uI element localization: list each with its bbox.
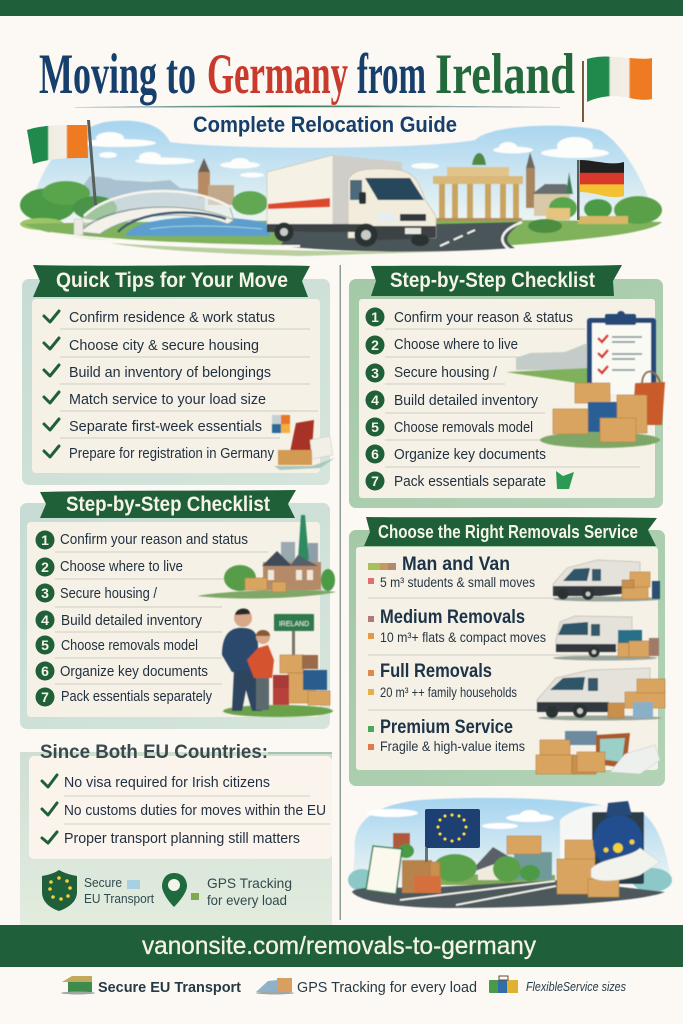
house and building [514,852,552,880]
check item: no visa: No visa required for Irish citizens [64,775,270,791]
step 7: 7 [41,689,49,705]
title: from [357,43,426,106]
step 2: 2 [41,559,49,575]
trees right [614,196,662,224]
vertical divider [340,265,341,920]
road curves [50,233,300,246]
panel background [20,503,330,729]
step 7 [366,472,546,490]
step 4: Build detailed inventory [61,613,203,629]
step 7 [36,688,213,706]
German city [526,168,535,208]
step 1: 1 [371,309,379,325]
check item 3: Build an inventory of belongings [69,365,271,381]
icon: German flag [577,160,624,220]
service: premium service: Fragile & high-value items [380,739,525,754]
step 5: Choose removals model [394,420,533,436]
service: man and van: 5 m³ students & small moves [380,575,535,590]
bridge [80,207,234,234]
hero illustration: Ireland to Germany [20,121,662,256]
step 4: 4 [371,392,379,408]
GPS tracking label: for every load [207,892,287,908]
ground [24,220,662,247]
service: full removals: 20 m³ ++ family households [380,685,517,700]
title [39,43,575,106]
service: medium removals [368,607,546,645]
step 1: Confirm your reason & status [394,310,573,326]
step 3 [366,364,498,382]
panel: choose the right removals service [349,517,665,786]
step 6: Organize key documents [60,664,208,680]
step 4: 4 [41,612,49,628]
illustration: German house with boxes [197,515,336,599]
icon: van 2 [553,616,659,660]
step 5 [366,418,533,436]
illustration: clipboard with boxes and bag [506,311,665,448]
step 1 [366,308,573,326]
water [125,217,270,236]
footer feature strip [61,976,626,996]
paper card [29,756,332,859]
paper card [32,299,320,473]
step 6 [366,444,546,464]
step 5 [36,636,198,654]
step 2: Choose where to live [60,559,183,575]
check item 2: Choose city & secure housing [69,338,259,354]
step 3: 3 [371,365,379,381]
illustration: EU moving scene [348,798,672,908]
check item: no customs: No customs duties for moves within the EU [64,803,326,819]
website band: vanonsite.com/removals-to-germany [142,932,536,960]
icon: van 3 [537,668,665,720]
step 4: Build detailed inventory [394,393,539,409]
step 7: Pack essentials separately [61,689,213,705]
title: Germany [207,43,348,106]
step 3: Secure housing / [60,586,158,602]
service: full removals: Full Removals [380,661,492,682]
panel: since both EU countries [20,741,332,925]
icon: flexible sizes case [489,976,518,993]
illustration: couple with boxes and sign: IRELAND [279,621,309,628]
road [352,880,665,908]
ribbon heading [371,265,622,296]
check item 1: Confirm residence & work status [69,310,275,326]
step 3 [36,584,158,602]
service: medium removals: Medium Removals [380,607,525,628]
step 5: Choose removals model [61,638,198,654]
step 4 [366,390,539,410]
step 2 [36,558,183,576]
title underline [75,106,560,108]
GPS tracking text: GPS Tracking for every load [297,979,477,996]
step 7: 7 [371,473,379,489]
service: full removals [368,661,517,700]
step 1: Confirm your reason and status [60,532,248,548]
secure EU transport text: Secure EU Transport [98,979,241,996]
step 4 [36,610,203,630]
icon: secure transport [61,976,95,994]
check item 5: Separate first-week essentials [69,419,262,435]
heading: Since Both EU Countries: [40,741,268,763]
ribbon heading: Quick Tips for Your Move [56,269,288,292]
checklist sheet and boxes [393,833,410,851]
step 5: 5 [41,637,49,653]
icon: premium items [536,731,660,774]
step 5: 5 [371,419,379,435]
distant city left [80,176,205,215]
flexible service sizes text: FlexibleService sizes [526,979,626,994]
step 6: Organize key documents [394,447,546,463]
paper card [27,522,320,717]
step 3: Secure housing / [394,365,498,381]
GPS tracking label [207,875,292,908]
step 7: Pack essentials separate [394,474,546,490]
panel: quick tips [22,265,335,485]
icon: Irish flag beside title [582,56,652,122]
icon: EU flag [425,809,480,862]
secure EU transport label [84,875,154,906]
step 2 [366,336,518,354]
paper card [359,299,655,498]
secure EU transport label: Secure [84,875,122,890]
website band [0,925,683,967]
icon: van and parcel [256,978,294,994]
ribbon heading: Step-by-Step Checklist [390,269,595,292]
GPS tracking label: GPS Tracking [207,875,292,891]
panel background [349,279,663,508]
icon: essentials box, book and tiles [272,415,335,470]
title: Moving to [39,43,196,106]
step 6: 6 [41,663,49,679]
subtitle: Complete Relocation Guide [193,112,457,137]
step 2: 2 [371,337,379,353]
ribbon heading: Choose the Right Removals Service [378,522,638,542]
check item 4: Match service to your load size [69,392,266,408]
step 3: 3 [41,585,49,601]
icon: GPS pin [162,873,199,907]
panel background [20,752,332,925]
top band [0,0,683,16]
service: premium service [368,717,525,754]
icon: green bag [556,471,574,489]
panel background [22,279,330,485]
ribbon heading: Step-by-Step Checklist [66,493,270,516]
title: Ireland [435,43,575,106]
step 2: Choose where to live [394,337,518,353]
illustration: couple with boxes and sign [222,608,333,717]
step 6: 6 [371,446,379,462]
step 1: 1 [41,532,49,548]
Brandenburg gate [472,153,486,165]
icon: EU shield [42,870,77,911]
paper card [356,547,658,770]
secure EU transport label: EU Transport [84,891,154,906]
boxes and globe [592,812,644,884]
check item: transport planning: Proper transport planning still matters [64,831,300,847]
service: man and van: Man and Van [402,554,510,575]
ribbon heading [33,265,310,297]
service: man and van [368,554,535,590]
panel: step-by-step checklist left [20,490,336,729]
panel: step-by-step checklist right [349,265,665,508]
step 6 [36,662,208,680]
check item 6: Prepare for registration in Germany [69,446,275,462]
icon: Irish flag in scene [27,120,97,205]
ribbon heading [364,517,657,546]
icon: removal truck [267,155,436,246]
service: medium removals: 10 m³+ flats & compact moves [380,630,546,645]
service: premium service: Premium Service [380,717,513,738]
panel background [349,530,665,786]
road [280,222,522,252]
trees left [20,188,76,222]
icon: van 1 [553,560,661,602]
